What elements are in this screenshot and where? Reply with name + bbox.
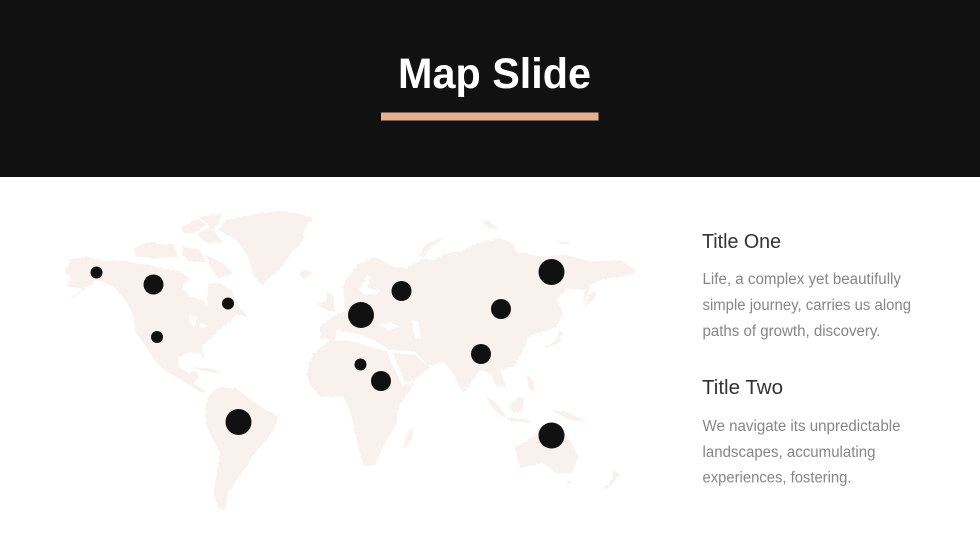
map: Europe, Asia, Africa and Oceania: [300, 221, 638, 490]
great lakes: [188, 315, 208, 328]
inland seas: [337, 275, 421, 349]
title underline accent: [381, 112, 598, 120]
body: title one: simple journey, carries us along: [702, 297, 911, 314]
map: Americas and Greenland: [65, 211, 313, 510]
world map: [65, 211, 638, 510]
body: title two: [702, 418, 900, 486]
body: title two: We navigate its unpredictable: [702, 418, 900, 435]
body: title one: paths of growth, discovery.: [702, 323, 880, 340]
title: Map Slide: [398, 50, 591, 98]
body: title two: landscapes, accumulating: [702, 444, 876, 461]
body: title one: [702, 271, 911, 340]
text block: title two: [702, 377, 900, 486]
heading: title two: Title Two: [702, 377, 783, 399]
body: title one: Life, a complex yet beautifully: [702, 271, 901, 288]
header band: [0, 0, 980, 177]
text block: title one: [702, 231, 911, 340]
body: title two: experiences, fostering.: [702, 470, 852, 486]
heading: title one: Title One: [702, 231, 781, 253]
location markers: [90, 259, 564, 448]
